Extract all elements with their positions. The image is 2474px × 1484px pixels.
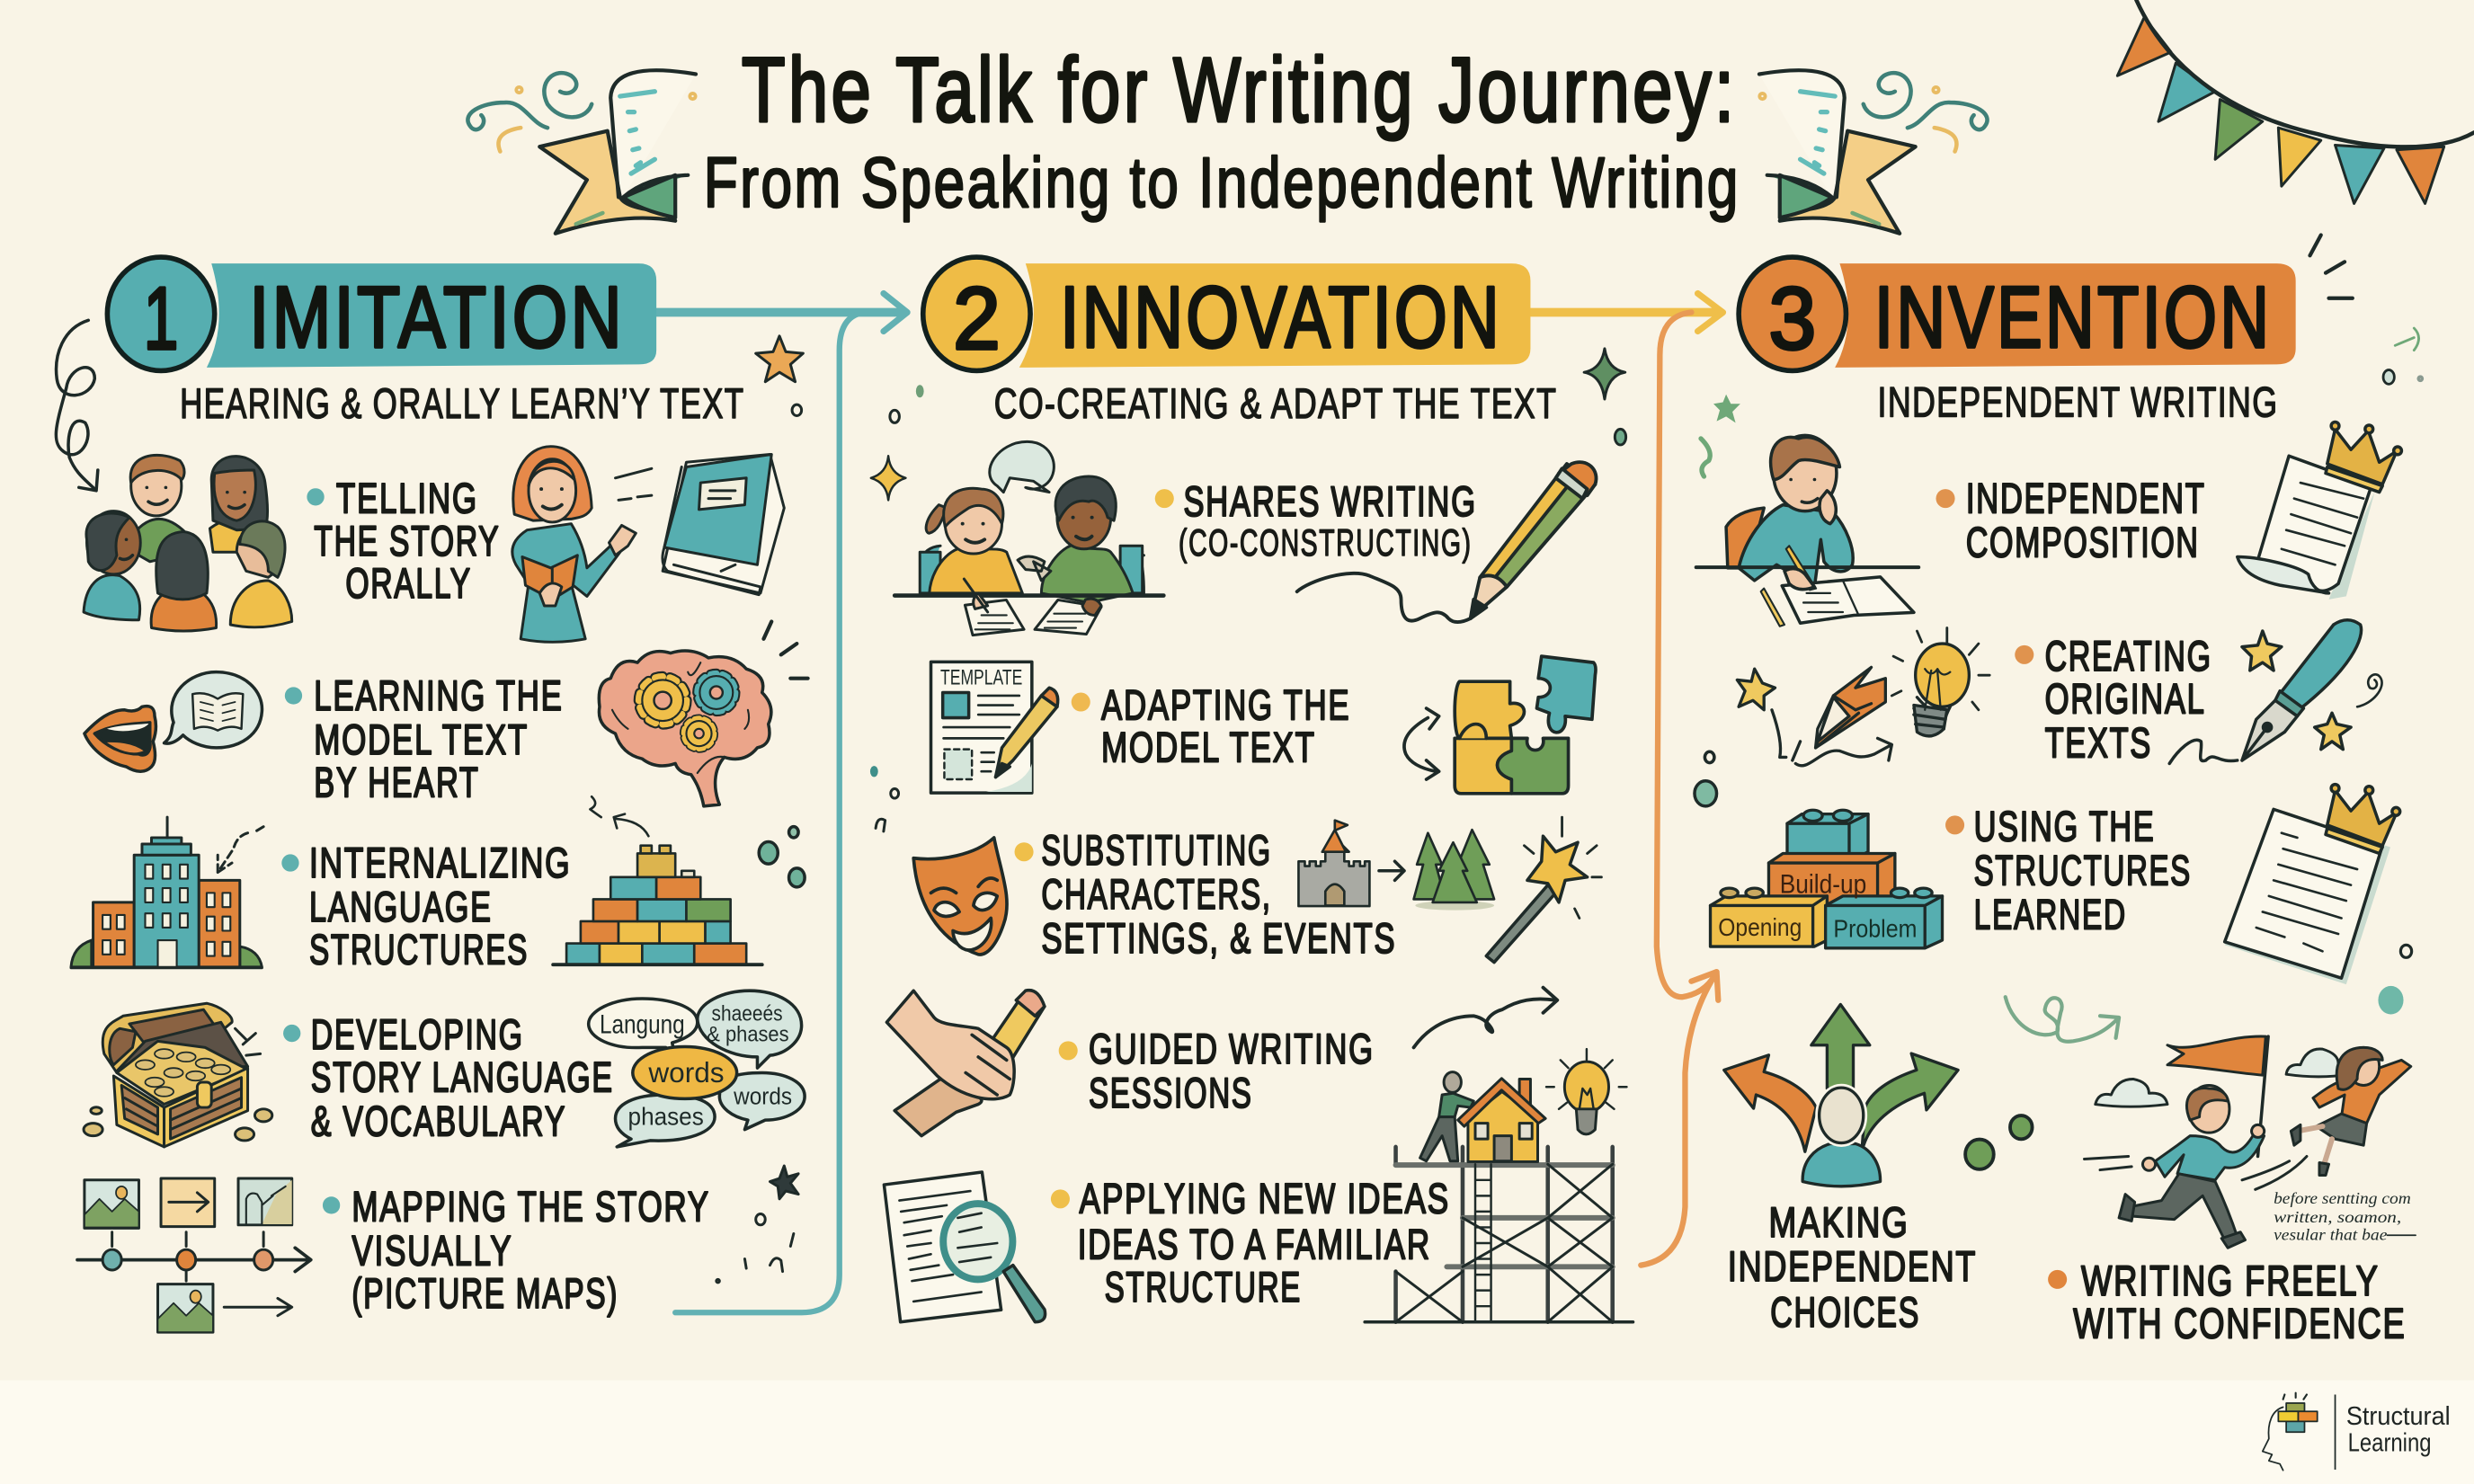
icon: puzzle pieces [1404, 656, 1596, 794]
icon: head with blocks [2263, 1393, 2318, 1471]
label: ADAPTING THE [1101, 681, 1350, 729]
icon: big teal book [663, 454, 784, 595]
item: creating original texts [1695, 620, 2382, 806]
item: mapping the story visually [77, 1166, 798, 1332]
label [1101, 681, 1350, 772]
label: LEARNED [1974, 892, 2127, 939]
icon: vocabulary speech bubbles: Langung [600, 1010, 685, 1040]
subheading: innovation: CO-CREATING & ADAPT THE TEXT [994, 380, 1557, 428]
item: using the structures learned [1711, 785, 2412, 984]
label: BY HEART [314, 759, 480, 806]
icon: vocabulary speech bubbles: words [647, 1056, 725, 1089]
item: internalizing language structures [71, 796, 805, 973]
title line 1: The Talk for Writing Journey: [742, 39, 1737, 141]
icon: big pencil [1297, 462, 1597, 622]
label [1966, 475, 2206, 567]
bullet [1945, 815, 1964, 834]
label: ORIGINAL [2045, 675, 2206, 723]
subheading: imitation: HEARING & ORALLY LEARN’Y TEXT [180, 380, 744, 428]
icon: star, kite, squiggle and lightbulb [1737, 628, 1989, 766]
icon: scaffold and house [1365, 1049, 1633, 1322]
connector arrow: imitation to innovation [656, 293, 907, 1312]
panel: imitation [56, 257, 808, 1332]
item: adapting the model text [931, 656, 1596, 794]
label [2045, 633, 2212, 767]
label: THE STORY [314, 518, 500, 565]
label: STRUCTURES [1974, 848, 2192, 895]
icon: vocabulary speech bubbles: phases [628, 1102, 704, 1130]
label: INTERNALIZING [309, 840, 571, 887]
logo: structural learning [2263, 1393, 2451, 1471]
label [2073, 1257, 2407, 1347]
icon: runner with flag and flying girl [2084, 1036, 2416, 1248]
icon: castle to forest [1298, 821, 1494, 911]
decor: dots [1695, 751, 1717, 806]
icon: story building blocks: Opening [1718, 913, 1802, 941]
label: STORY LANGUAGE [311, 1054, 614, 1102]
title block [467, 39, 1988, 234]
item: independent composition [1696, 422, 2401, 626]
label: SESSIONS [1089, 1070, 1253, 1117]
decor: green bubbles and swirl arrow [1965, 986, 2404, 1169]
label [1974, 803, 2192, 939]
decor: dark star and marks [716, 1166, 798, 1283]
bullet [2048, 1270, 2067, 1289]
bullet [323, 1196, 340, 1214]
icon: person and three arrows [1724, 1004, 1958, 1186]
panel: invention [1695, 235, 2422, 1347]
item: shares writing [894, 441, 1597, 635]
label: & VOCABULARY [311, 1098, 566, 1146]
bullet [281, 854, 299, 872]
label: SUBSTITUTING [1041, 827, 1272, 875]
decor: radiating marks and green shapes [1701, 235, 2422, 476]
label: STRUCTURES [309, 926, 529, 973]
label: (PICTURE MAPS) [352, 1270, 618, 1318]
logo text: Learning [2348, 1429, 2432, 1458]
label [1041, 827, 1396, 963]
label: TELLING [336, 475, 478, 522]
heading: innovation: INNOVATION [1060, 270, 1502, 366]
bullet [1072, 692, 1090, 712]
decor: star and dots [756, 336, 803, 415]
label: USING THE [1974, 803, 2155, 850]
item: guided writing [886, 988, 1557, 1136]
label [309, 840, 571, 973]
label [1179, 478, 1477, 564]
label: MODEL TEXT [1101, 724, 1316, 772]
label: MODEL TEXT [314, 716, 529, 764]
icon: document with crown [2225, 785, 2400, 984]
icon: template document and pencil [931, 662, 1058, 793]
icon: vocabulary speech bubbles: shaeeés [712, 1003, 783, 1026]
icon: story building blocks: Problem [1833, 915, 1917, 943]
icon: brain with gears [599, 621, 808, 806]
heading: imitation [107, 257, 656, 370]
icon: speaking mouth and book bubble [85, 672, 262, 771]
label: SETTINGS, & EVENTS [1041, 915, 1396, 963]
icon: teacher reading [512, 447, 652, 642]
icon: curly arrow [56, 320, 98, 491]
label: STRUCTURE [1105, 1264, 1302, 1311]
icon: theatre mask [913, 838, 1007, 955]
bullet [307, 488, 325, 506]
icon: template document and pencil: TEMPLATE [940, 667, 1022, 690]
label: (CO-CONSTRUCTING) [1179, 521, 1473, 564]
label: DEVELOPING [311, 1011, 524, 1059]
bullet [285, 687, 302, 705]
icon: runner with flag and flying girl: vesular that bae [2274, 1225, 2387, 1243]
bullet [1051, 1189, 1070, 1208]
bullet [1015, 842, 1034, 861]
icon: two children co-writing [894, 441, 1163, 635]
heading: imitation: IMITATION [249, 270, 625, 366]
decor: dots and sparkles [870, 349, 1626, 831]
label: MAPPING THE STORY [352, 1183, 710, 1231]
item: learning the model text [85, 621, 808, 806]
label: INDEPENDENT [1966, 475, 2206, 522]
label: WRITING FREELY [2081, 1257, 2380, 1305]
item: developing story language and vocabulary [84, 991, 805, 1147]
divider line [2335, 1394, 2336, 1470]
icon: vocabulary speech bubbles: & phases [707, 1023, 789, 1046]
icon: vocabulary speech bubbles [589, 991, 805, 1147]
icon: runner with flag and flying girl: written, soamon, [2274, 1208, 2401, 1226]
heading: invention: 3 [1768, 269, 1816, 368]
item: making independent choices [1724, 1004, 1977, 1337]
title banner left [467, 70, 696, 234]
label: LEARNING THE [314, 672, 564, 720]
bullet [2015, 645, 2033, 664]
icon: scroll with crown [2238, 422, 2401, 600]
label: APPLYING NEW IDEAS [1079, 1176, 1450, 1223]
label: ORALLY [345, 560, 472, 608]
heading: invention [1739, 257, 2296, 370]
logo text [2346, 1402, 2451, 1458]
label: CHARACTERS, [1041, 871, 1272, 919]
label: LANGUAGE [309, 884, 493, 931]
label: SHARES WRITING [1183, 478, 1477, 526]
decor: teal bubbles [759, 827, 805, 887]
label [311, 1011, 614, 1146]
item: writing freely with confidence [2048, 1036, 2416, 1347]
item: telling the story orally [84, 447, 784, 642]
icon: story building blocks: Build-up [1780, 869, 1866, 899]
icon: vocabulary speech bubbles: words [733, 1083, 792, 1110]
icon: curved arrow [1414, 988, 1557, 1047]
label [314, 672, 564, 806]
label: MAKING [1768, 1199, 1909, 1247]
heading: invention: INVENTION [1874, 270, 2272, 366]
icon: group of children [84, 455, 292, 631]
label: TEXTS [2045, 719, 2152, 767]
label [352, 1183, 710, 1318]
label: CREATING [2045, 633, 2212, 680]
bullet [1936, 489, 1955, 508]
label [314, 475, 500, 608]
icon: magic wand [1486, 817, 1601, 963]
label: GUIDED WRITING [1089, 1026, 1375, 1073]
title banner right [1759, 70, 1988, 234]
icon: story building blocks [1711, 810, 1943, 948]
bullet [283, 1025, 300, 1042]
bullet [1155, 489, 1174, 508]
subheading: invention: INDEPENDENT WRITING [1878, 378, 2278, 426]
icon: city buildings [71, 817, 263, 968]
label [1728, 1199, 1977, 1337]
item: substituting characters [913, 817, 1601, 963]
icon: fountain pen with stars [2169, 620, 2382, 763]
heading: imitation: 1 [144, 269, 178, 368]
bunting [2117, 0, 2474, 203]
title line 2: From Speaking to Independent Writing [704, 143, 1740, 222]
item: applying new ideas [884, 1049, 1633, 1322]
icon: runner with flag and flying girl: before sentting com [2274, 1189, 2411, 1207]
icon: document and magnifier [884, 1172, 1046, 1322]
logo text: Structural [2346, 1402, 2451, 1431]
icon: boy writing at desk [1696, 435, 1918, 626]
connector arrow: innovation to invention [1527, 293, 1723, 332]
heading: innovation [923, 257, 1530, 370]
label [1089, 1026, 1375, 1117]
label [1078, 1176, 1450, 1311]
label: COMPOSITION [1966, 520, 2200, 567]
label: IDEAS TO A FAMILIAR [1078, 1222, 1431, 1269]
bullet [1059, 1041, 1078, 1060]
heading: innovation: 2 [953, 269, 1001, 368]
label: INDEPENDENT [1728, 1243, 1977, 1291]
icon: treasure chest [84, 1003, 272, 1147]
icon: hand guiding pencil [886, 991, 1045, 1136]
panel: innovation [870, 257, 1633, 1322]
decor: small circle [2400, 945, 2412, 957]
icon: picture map timeline [77, 1178, 311, 1332]
label: VISUALLY [352, 1228, 512, 1275]
label: CHOICES [1770, 1289, 1920, 1337]
connector arrow: orange journey line [1641, 313, 1718, 1266]
icon: brick pyramid [553, 796, 762, 964]
